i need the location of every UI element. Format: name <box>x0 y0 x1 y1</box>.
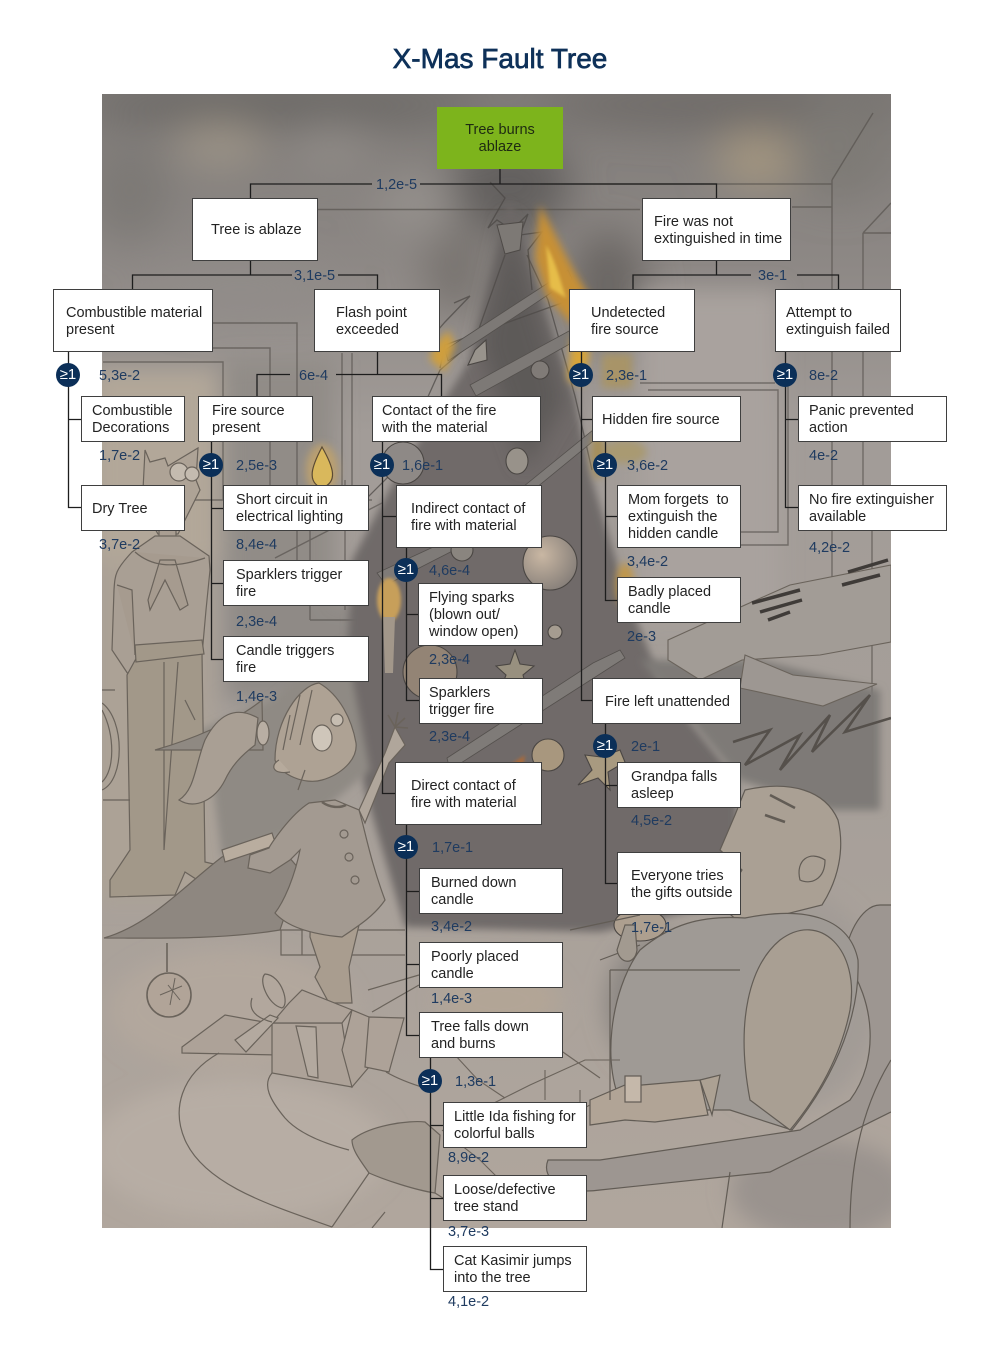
OR gates: ≥1 <box>374 456 390 473</box>
probability values: 3e-1 <box>758 268 787 284</box>
event: undetected fire source: Undetected <box>591 304 665 320</box>
probability values: 3,4e-2 <box>431 919 472 935</box>
event: short circuit: Short circuit in <box>236 492 328 508</box>
event: top event: ablaze <box>479 139 521 155</box>
smoke <box>104 94 822 330</box>
event: badly placed candle: Badly placed <box>628 584 711 600</box>
background illustration: burning Christmas tree in living room <box>102 94 891 1228</box>
event: poorly placed candle <box>419 942 563 988</box>
event: flash point: Flash point <box>336 304 407 320</box>
event: fire not extinguished: Fire was not <box>654 214 733 230</box>
hand fishing and small objects <box>442 1052 620 1175</box>
event: combustible decorations <box>81 396 185 442</box>
lower tree branch <box>104 700 405 955</box>
event: no fire extinguisher <box>798 485 947 531</box>
probability values: 1,7e-1 <box>432 840 473 856</box>
event: panic: Panic prevented <box>809 403 914 419</box>
probability values: 3,6e-2 <box>627 458 668 474</box>
event: top event: Tree burns <box>465 122 535 138</box>
event: fire not extinguished: extinguished in time <box>654 230 782 246</box>
OR gates: ≥1 <box>398 561 414 578</box>
OR gates: ≥1 <box>60 366 76 383</box>
tree tip <box>488 182 542 290</box>
event: sparklers trigger fire A <box>223 560 369 606</box>
probability values: 3,1e-5 <box>294 268 335 284</box>
event: attempt to extinguish: extinguish failed <box>786 322 890 338</box>
event: no fire extinguisher: available <box>809 509 866 525</box>
probability values: 1,2e-5 <box>376 177 417 193</box>
event: flying sparks: window open) <box>429 624 518 640</box>
OR gates: ≥1 <box>573 366 589 383</box>
event: mom forgets: extinguish the <box>628 509 717 525</box>
probability values: 2e-1 <box>631 739 660 755</box>
event: contact of fire: with the material <box>382 420 488 436</box>
event: short circuit <box>223 485 369 531</box>
event: mom forgets <box>617 485 741 548</box>
girl <box>179 683 408 1003</box>
event: little ida <box>443 1102 587 1148</box>
OR gates: ≥1 <box>597 456 613 473</box>
probability values: 3,4e-2 <box>627 554 668 570</box>
event: mom forgets: hidden candle <box>628 526 718 542</box>
event: fire source present <box>198 396 313 442</box>
probability values: 1,4e-3 <box>431 991 472 1007</box>
room frames <box>103 112 891 692</box>
outline and branches <box>369 255 592 497</box>
event: sparklers trigger fire B: Sparklers <box>429 685 490 701</box>
event: everyone tries gifts: the gifts outside <box>631 884 733 900</box>
title: X-Mas Fault Tree <box>393 43 607 74</box>
event: direct contact <box>395 762 542 825</box>
probability values: 2,5e-3 <box>236 458 277 474</box>
probability values: 6e-4 <box>299 368 328 384</box>
event: sparklers trigger fire A: Sparklers trigger <box>236 567 342 583</box>
OR gates: ≥1 <box>398 838 414 855</box>
event: burned down candle: Burned down <box>431 875 516 891</box>
event: flying sparks: Flying sparks <box>429 590 514 606</box>
event: dry tree: Dry Tree <box>92 500 148 516</box>
event: sparklers trigger fire B <box>419 678 543 724</box>
lap and blanket curves <box>179 1053 470 1228</box>
probability values: 8,4e-4 <box>236 537 277 553</box>
probability values: 8e-2 <box>809 368 838 384</box>
event: loose tree stand: Loose/defective <box>454 1182 556 1198</box>
event: combustible decorations: Combustible <box>92 403 173 419</box>
event: top event <box>437 107 563 169</box>
event: attempt to extinguish: Attempt to <box>786 304 852 320</box>
event: cat kasimir: into the tree <box>454 1270 531 1286</box>
event: indirect contact: fire with material <box>411 518 517 534</box>
left man <box>102 447 213 898</box>
probability values: 4,2e-2 <box>809 540 850 556</box>
OR gates: ≥1 <box>777 366 793 383</box>
event: sparklers trigger fire A: fire <box>236 584 256 600</box>
cat <box>668 560 891 706</box>
event: sparklers trigger fire B: trigger fire <box>429 702 494 718</box>
probability values: 2,3e-1 <box>606 368 647 384</box>
event: poorly placed candle: candle <box>431 966 474 982</box>
garland bands <box>377 430 597 585</box>
event: flying sparks: (blown out/ <box>429 607 500 623</box>
event: grandpa falls asleep: asleep <box>631 786 674 802</box>
flames <box>306 205 647 775</box>
probability values: 1,4e-3 <box>236 689 277 705</box>
probability values: 2e-3 <box>627 629 656 645</box>
event: candle triggers fire: Candle triggers <box>236 643 334 659</box>
ornament <box>147 943 191 1017</box>
event: attempt to extinguish <box>775 289 901 352</box>
event: burned down candle: candle <box>431 892 474 908</box>
event: tree is ablaze <box>192 198 318 261</box>
warm left wall and lower room tones <box>90 290 910 1240</box>
probability values: 1,7e-1 <box>631 920 672 936</box>
event: little ida: colorful balls <box>454 1126 535 1142</box>
event: tree falls down <box>419 1012 563 1058</box>
event: tree falls down: and burns <box>431 1036 496 1052</box>
event: direct contact: fire with material <box>411 794 517 810</box>
event: combustible material: present <box>66 322 114 338</box>
event: cat kasimir: Cat Kasimir jumps <box>454 1253 572 1269</box>
event: flying sparks <box>418 583 543 646</box>
probability values: 4e-2 <box>809 448 838 464</box>
event: loose tree stand <box>443 1175 587 1221</box>
event: dry tree <box>81 485 185 531</box>
grandpa <box>547 786 895 1228</box>
event: grandpa falls asleep <box>617 762 741 808</box>
event: combustible material: Combustible material <box>66 304 202 320</box>
event: everyone tries gifts: Everyone tries <box>631 868 724 884</box>
probability values: 4,1e-2 <box>448 1294 489 1310</box>
event: flash point <box>314 289 440 352</box>
event: mom forgets: Mom forgets to <box>628 492 729 508</box>
event: indirect contact: Indirect contact of <box>411 500 525 516</box>
event: indirect contact <box>396 485 542 548</box>
event: tree falls down: Tree falls down <box>431 1019 529 1035</box>
event: loose tree stand: tree stand <box>454 1199 518 1215</box>
event: fire source present: present <box>212 420 260 436</box>
gifts <box>182 974 425 1088</box>
event: undetected fire source <box>569 289 695 352</box>
probability values: 5,3e-2 <box>99 368 140 384</box>
event: cat kasimir <box>443 1246 587 1292</box>
event: fire left unattended: Fire left unattended <box>605 694 730 710</box>
probability values: 1,3e-1 <box>455 1074 496 1090</box>
event: hidden fire source: Hidden fire source <box>602 412 720 428</box>
event: little ida: Little Ida fishing for <box>454 1109 576 1125</box>
event: panic <box>798 396 947 442</box>
OR gates: ≥1 <box>203 456 219 473</box>
event: contact of fire: Contact of the fire <box>382 403 496 419</box>
event: direct contact: Direct contact of <box>411 778 516 794</box>
event: tree is ablaze: Tree is ablaze <box>211 222 302 238</box>
event: candle triggers fire <box>223 636 369 682</box>
event: fire left unattended <box>592 678 741 724</box>
probability values: 2,3e-4 <box>429 652 470 668</box>
OR gates: ≥1 <box>422 1072 438 1089</box>
event: candle triggers fire: fire <box>236 660 256 676</box>
probability values: 8,9e-2 <box>448 1150 489 1166</box>
event: fire not extinguished <box>642 198 791 261</box>
event: badly placed candle: candle <box>628 601 671 617</box>
event: combustible material <box>53 289 213 352</box>
event: undetected fire source: fire source <box>591 322 659 338</box>
event: combustible decorations: Decorations <box>92 420 169 436</box>
probability values: 2,3e-4 <box>429 729 470 745</box>
probability values: 2,3e-4 <box>236 614 277 630</box>
ZZZ sleeping <box>733 695 891 770</box>
probability values: 3,7e-3 <box>448 1224 489 1240</box>
probability values: 4,5e-2 <box>631 813 672 829</box>
event: badly placed candle <box>617 577 741 623</box>
event: no fire extinguisher: No fire extinguisher <box>809 492 934 508</box>
event: panic: action <box>809 420 848 436</box>
event: contact of fire <box>372 396 541 442</box>
event: grandpa falls asleep: Grandpa falls <box>631 769 717 785</box>
probability values: 3,7e-2 <box>99 537 140 553</box>
event: flash point: exceeded <box>336 322 399 338</box>
OR gates: ≥1 <box>597 737 613 754</box>
tree body <box>155 182 880 932</box>
event: burned down candle <box>419 868 563 914</box>
ornaments and stars <box>382 340 666 941</box>
probability values: 1,6e-1 <box>402 458 443 474</box>
event: short circuit: electrical lighting <box>236 509 343 525</box>
probability values: 1,7e-2 <box>99 448 140 464</box>
event: everyone tries gifts <box>617 852 741 915</box>
event: poorly placed candle: Poorly placed <box>431 949 519 965</box>
event: fire source present: Fire source <box>212 403 285 419</box>
event: hidden fire source <box>592 396 741 442</box>
probability values: 4,6e-4 <box>429 563 470 579</box>
